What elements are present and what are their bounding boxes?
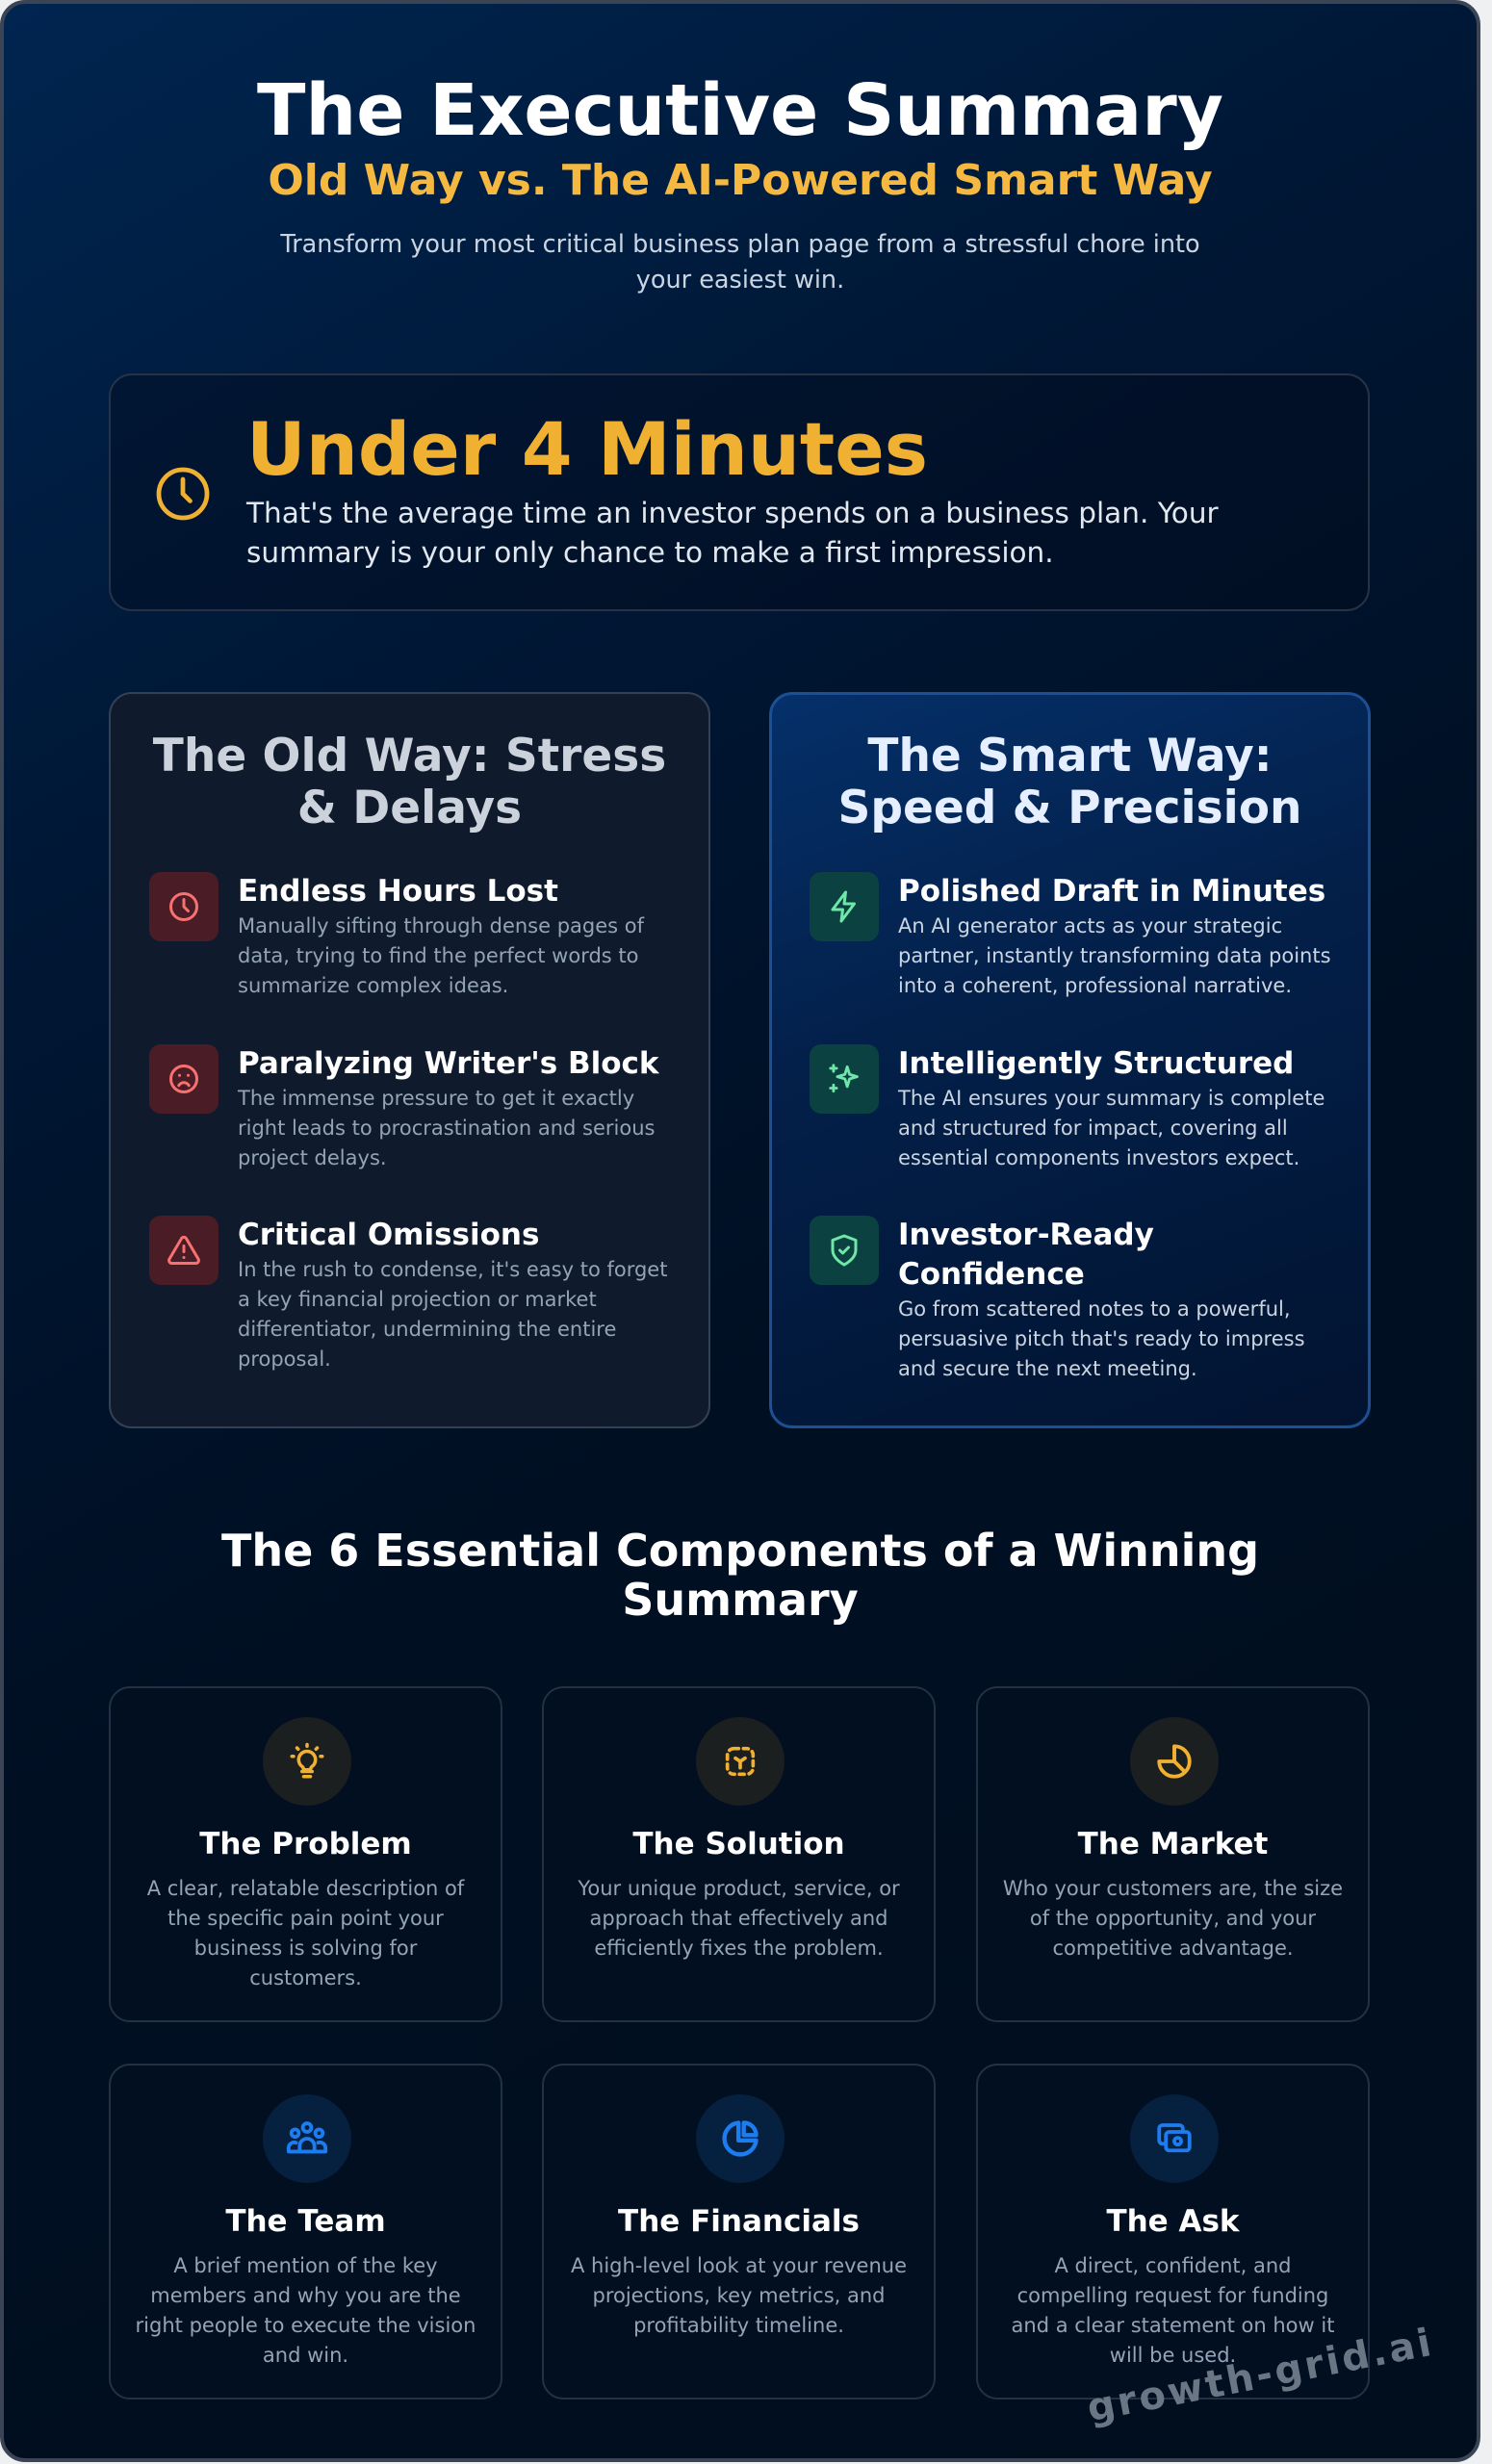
icon: sad face (149, 1044, 219, 1114)
item: omissions (149, 1216, 667, 1371)
item: endless hours (149, 872, 645, 997)
item text: Investor-Ready (898, 1218, 1154, 1252)
card text: A high-level look at your revenue projections, key metrics, and profitability timeline. (571, 2254, 907, 2337)
subtitle: Old Way vs. The AI-Powered Smart Way (268, 156, 1213, 205)
card: market (976, 1686, 1370, 2022)
panel: smart way (769, 692, 1371, 1428)
card: financials (542, 2064, 936, 2400)
card text: Who your customers are, the size of the opportunity, and your competitive advantage. (1003, 1877, 1343, 1960)
item text (237, 1046, 659, 1169)
item text: Paralyzing Writer's Block (238, 1046, 659, 1081)
smart way heading: The Smart Way: (867, 730, 1273, 783)
card: ask (976, 2064, 1370, 2400)
card text: A clear, relatable description of the specific pain point your business is solving for customers. (147, 1877, 464, 1989)
icon: lightbulb (263, 1717, 351, 1806)
card title: The Problem (199, 1827, 412, 1861)
card text: A brief mention of the key members and why you are the right people to execute the vision and win. (136, 2254, 476, 2367)
smart way heading: Speed & Precision (838, 782, 1301, 834)
icon: clock (156, 468, 210, 520)
section heading: Summary (622, 1574, 859, 1626)
card: solution (542, 1686, 936, 2022)
icon: bolt (810, 872, 879, 941)
card: team (109, 2064, 502, 2400)
tagline: Transform your most critical business plan page from a stressful chore into (280, 230, 1200, 259)
icon: pie (1130, 1717, 1219, 1806)
item text: An AI generator acts as your strategic partner, instantly transforming data points into a coherent, professional narrative. (898, 914, 1331, 997)
icon: pie chart (696, 2094, 785, 2183)
item text: Polished Draft in Minutes (898, 874, 1325, 909)
icon: warning (149, 1216, 219, 1285)
item text (238, 874, 645, 997)
item text: Go from scattered notes to a powerful, persuasive pitch that's ready to impress and secure the next meeting. (898, 1297, 1305, 1380)
section heading (221, 1525, 1259, 1626)
item text: In the rush to condense, it's easy to forget a key financial projection or market differentiator, undermining the entire proposal. (238, 1258, 667, 1371)
item text (898, 1218, 1305, 1380)
item text: Manually sifting through dense pages of data, trying to find the perfect words to summarize complex ideas. (238, 914, 644, 997)
card text: Your unique product, service, or approach that effectively and efficiently fixes the problem. (578, 1877, 900, 1960)
card text: A direct, confident, and compelling request for funding and a clear statement on how it will be used. (1012, 2254, 1334, 2367)
icon: team (263, 2094, 351, 2183)
icon: clock red (149, 872, 219, 941)
item text: Critical Omissions (238, 1218, 539, 1252)
card title: The Ask (1106, 2204, 1240, 2239)
smart way heading (838, 730, 1301, 834)
tagline: your easiest win. (636, 266, 844, 295)
watermark: growth-grid.ai (1084, 2321, 1437, 2431)
title: The Executive Summary (257, 69, 1223, 152)
stat callout (109, 373, 1370, 611)
item text (897, 1046, 1325, 1169)
item: structured (810, 1044, 1325, 1169)
item text: The immense pressure to get it exactly right leads to procrastination and serious project delays. (238, 1087, 655, 1169)
old way heading: The Old Way: Stress (153, 730, 666, 783)
old way heading: & Delays (297, 782, 522, 834)
old way heading (152, 730, 666, 834)
stat text (246, 497, 1219, 569)
icon: focus (696, 1717, 785, 1806)
item: writer's block (149, 1044, 659, 1169)
card title: The Market (1078, 1827, 1268, 1861)
item text: The AI ensures your summary is complete and structured for impact, covering all essential components investors expect. (898, 1087, 1325, 1169)
item text: Endless Hours Lost (238, 874, 558, 909)
panel: old way (109, 692, 710, 1428)
card title: The Solution (632, 1827, 845, 1861)
stat text: summary is your only chance to make a first impression. (246, 536, 1054, 569)
item text: Confidence (898, 1257, 1085, 1292)
icon: money (1130, 2094, 1219, 2183)
card title: The Financials (618, 2204, 860, 2239)
card title: The Team (225, 2204, 386, 2239)
item text (898, 874, 1331, 997)
icon: sparkles (810, 1044, 879, 1114)
stat text: That's the average time an investor spends on a business plan. Your (246, 497, 1219, 529)
icon: shield (810, 1216, 879, 1285)
item: polished draft (810, 872, 1331, 997)
item text: Intelligently Structured (898, 1046, 1294, 1081)
stat headline: Under 4 Minutes (246, 406, 928, 492)
tagline (280, 230, 1200, 295)
item: confidence (810, 1216, 1305, 1380)
section heading: The 6 Essential Components of a Winning (221, 1525, 1259, 1577)
card: problem (109, 1686, 502, 2022)
